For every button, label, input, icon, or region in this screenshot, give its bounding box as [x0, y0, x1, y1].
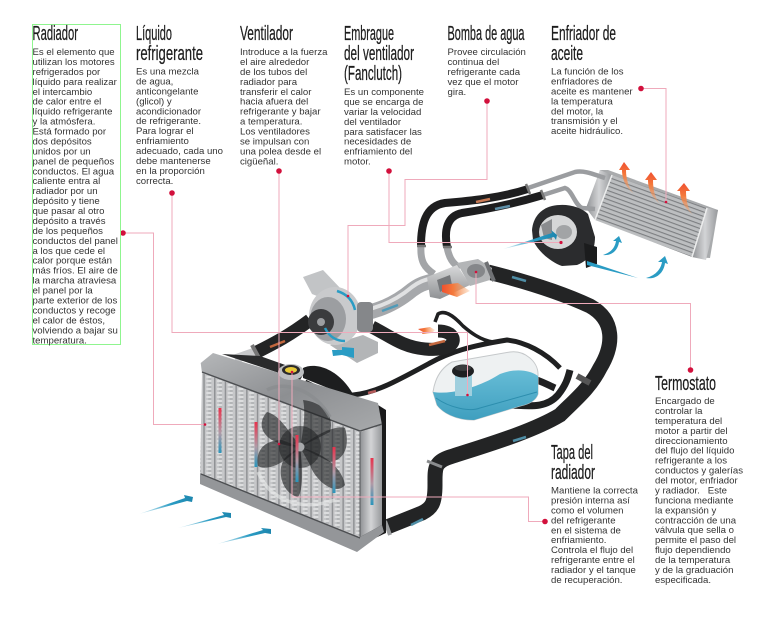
panel: Ventilador: Ventilador — [240, 23, 293, 45]
panel: Tapa del radiador: como el volumen — [551, 505, 624, 516]
panel: Radiador: líquido refrigerante — [32, 107, 112, 118]
panel: Termostato: Termostato — [655, 373, 716, 395]
panel: Bomba de agua — [448, 23, 526, 98]
thin hoses — [305, 312, 570, 406]
panel: Líquido refrigerante: adecuado, cada uno — [136, 146, 223, 157]
panel: Embrague del ventilador: que se encarga de — [344, 97, 423, 108]
panel: Bomba de agua: refrigerante cada — [448, 67, 521, 78]
panel: Líquido refrigerante: en la proporción — [136, 166, 205, 177]
panel: Bomba de agua: Provee circulación — [448, 47, 526, 58]
panel: Tapa del radiador: del refrigerante — [551, 515, 616, 526]
panel: Termostato — [655, 373, 743, 586]
panel: Termostato: de la temperatura — [655, 555, 731, 566]
radiator — [200, 353, 386, 552]
panel: Ventilador: una polea desde el — [240, 146, 321, 157]
panel: Radiador: volviendo a bajar su — [32, 325, 118, 336]
metal pipe and thermostat housing — [365, 259, 494, 313]
orange heat arrows — [619, 162, 693, 215]
panel: Termostato: controlar la — [655, 406, 703, 417]
panel: Bomba de agua: gira. — [448, 87, 466, 98]
panel: Enfriador de aceite: aceite es mantener — [551, 86, 633, 97]
blower motor — [532, 205, 597, 268]
panel: Radiador: utilizan los motores — [32, 57, 115, 68]
panel: Líquido refrigerante: anticongelante — [136, 86, 198, 97]
panel: Embrague del ventilador: del ventilador — [344, 43, 414, 65]
panel: Enfriador de aceite: transmisión y el — [551, 116, 618, 127]
leader lines — [120, 86, 693, 524]
panel: Radiador: panel de pequeños — [32, 156, 114, 167]
large hose: thermostat to radiator — [385, 272, 610, 535]
panel: Ventilador: se impulsan con — [240, 136, 309, 147]
panel: Enfriador de aceite — [551, 23, 633, 137]
panel: Embrague del ventilador — [344, 23, 424, 168]
panel: Termostato: funciona mediante — [655, 495, 733, 506]
panel: Enfriador de aceite: aceite — [551, 43, 583, 65]
panel: Tapa del radiador: Tapa del — [551, 442, 593, 464]
panel: Radiador: conductos y recoge — [32, 305, 116, 316]
hoses to oil cooler — [417, 172, 605, 274]
panel: Bomba de agua: continua del — [448, 57, 499, 68]
blue inlet air arrows — [139, 495, 271, 544]
panel: Tapa del radiador: de recuperación. — [551, 575, 622, 586]
panel: Líquido refrigerante: (glicol) y — [136, 96, 172, 107]
panel: Radiador: líquido para realizar — [32, 77, 118, 88]
panel: Embrague del ventilador: (Fanclutch) — [344, 63, 402, 85]
panel: Radiador: el calor de éstos, — [32, 315, 105, 326]
panel: Ventilador: Introduce a la fuerza — [240, 47, 328, 58]
cooling fan — [257, 400, 347, 497]
panel: Radiador: conductos del panel — [32, 236, 118, 247]
panel: Termostato: permite el paso del — [655, 535, 736, 546]
panel: Radiador: conductos. El agua — [32, 166, 115, 177]
panel: Termostato: y radiador. Este — [655, 485, 727, 496]
panel: Radiador: el panel por la — [32, 286, 93, 297]
panel: Líquido refrigerante: de agua, — [136, 76, 173, 87]
panel: Radiador: el intercambio — [32, 87, 92, 98]
panel: Tapa del radiador: radiador — [551, 462, 595, 484]
panel: Termostato: contracción de una — [655, 515, 737, 526]
panel: Termostato: Encargado de — [655, 396, 715, 407]
panel: Bomba de agua: Bomba de agua — [448, 23, 525, 45]
panel: Embrague del ventilador: del ventilador — [344, 117, 402, 128]
panel: Ventilador: transferir el calor — [240, 87, 312, 98]
panel: Termostato: refrigerante a los — [655, 456, 727, 467]
water pump — [303, 270, 378, 363]
panel: Tapa del radiador: refrigerante entre el — [551, 555, 635, 566]
panel: Radiador: Está formado por — [32, 127, 107, 138]
panel: Ventilador: refrigerante y bajar — [240, 107, 321, 118]
panel: Enfriador de aceite: del motor, la — [551, 106, 604, 117]
panel: Tapa del radiador: Controla el flujo del — [551, 545, 633, 556]
panel: Radiador: que pasar al otro — [32, 206, 104, 217]
panel: Termostato: temperatura del — [655, 416, 722, 427]
panel: Ventilador: cigüeñal. — [240, 156, 278, 167]
panel: Embrague del ventilador: Es un componente — [344, 87, 424, 98]
panel: Radiador: temperatura. — [32, 335, 87, 346]
panel: Termostato: y de la graduación — [655, 565, 733, 576]
panel: Termostato: especificada. — [655, 575, 711, 586]
panel: Líquido refrigerante: de refrigerante. — [136, 116, 201, 127]
arrows at pump and thermostat — [332, 283, 470, 358]
panel: Embrague del ventilador: motor. — [344, 157, 371, 168]
coolant tank — [433, 352, 538, 420]
panel: Enfriador de aceite: la temperatura — [551, 96, 614, 107]
panel: Termostato: direccionamiento — [655, 436, 728, 447]
hose: pump to tank — [372, 327, 453, 349]
panel: Bomba de agua: vez que el motor — [448, 77, 519, 88]
panel: Tapa del radiador: Mantiene la correcta — [551, 486, 639, 496]
panel: Radiador — [32, 23, 120, 346]
panel: Radiador: más fríos. El aire de — [32, 266, 118, 277]
panel: Enfriador de aceite: aceite hidráulico. — [551, 126, 623, 137]
oil cooler — [586, 170, 718, 260]
panel: Radiador: a los que cede el — [32, 246, 105, 257]
panel: Ventilador: radiador para — [240, 77, 298, 88]
panel: Líquido refrigerante: Para lograr el — [136, 126, 194, 137]
panel: Radiador: refrigerados por — [32, 67, 101, 78]
panel: Tapa del radiador: radiador y el tanque — [551, 565, 636, 576]
panel: Embrague del ventilador: enfriamiento del — [344, 147, 412, 158]
panel: Radiador: dos depósitos — [32, 136, 92, 147]
panel: Embrague del ventilador: variar la velocidad — [344, 107, 421, 118]
blue air flow arrows at blower — [503, 230, 668, 278]
panel: Ventilador: a temperatura. — [240, 117, 302, 128]
flow bars — [218, 408, 374, 505]
panel: Radiador: calor porque están — [32, 256, 112, 267]
panel: Enfriador de aceite: La función de los — [551, 66, 624, 78]
panel: Líquido refrigerante: acondicionador — [136, 106, 202, 117]
panel: Termostato: la expansión y — [655, 505, 717, 516]
panel: Tapa del radiador: enfriamiento. — [551, 535, 606, 546]
panel: Ventilador: Los ventiladores — [240, 127, 310, 138]
panel: Líquido refrigerante: debe mantenerse — [136, 156, 211, 167]
panel: Embrague del ventilador: necesidades de — [344, 137, 411, 148]
hose: pump to radiator — [235, 320, 310, 359]
panel: Termostato: motor a partir del — [655, 426, 728, 437]
panel: Ventilador — [240, 23, 328, 167]
panel: Ventilador: de los tubos del — [240, 67, 307, 78]
panel: Embrague del ventilador: Embrague — [344, 23, 394, 45]
panel: Radiador: unidos por un — [32, 146, 91, 157]
panel: Radiador: radiador por un — [32, 186, 98, 197]
panel: Líquido refrigerante: enfriamiento — [136, 136, 189, 147]
panel: Radiador: Es el elemento que — [32, 47, 115, 58]
panel: Líquido refrigerante — [136, 23, 223, 187]
panel: Termostato: conductos y galerías — [655, 466, 743, 477]
panel: Enfriador de aceite: enfriadores de — [551, 76, 612, 87]
panel: Termostato: del flujo del líquido — [655, 446, 734, 457]
panel: Líquido refrigerante: refrigerante — [136, 43, 203, 65]
panel: Embrague del ventilador: para satisfacer las — [344, 127, 422, 138]
panel: Termostato: válvula que sella o — [655, 525, 734, 536]
panel: Enfriador de aceite: Enfriador de — [551, 23, 616, 45]
panel: Radiador: caliente entra al — [32, 176, 100, 187]
panel: Radiador: parte exterior de los — [32, 296, 117, 307]
panel: Radiador: de calor entre el — [32, 97, 101, 108]
panel: Ventilador: el aire alrededor — [240, 57, 310, 68]
panel: Termostato: del motor, enfriador — [655, 476, 738, 487]
panel: Radiador: y la atmósfera. — [32, 117, 95, 128]
panel: Líquido refrigerante: Líquido — [136, 23, 172, 45]
panel: Líquido refrigerante: correcta. — [136, 176, 173, 187]
panel: Radiador: Radiador — [32, 23, 78, 45]
panel: Tapa del radiador: presión interna así — [551, 495, 630, 506]
radiator cap — [278, 364, 304, 380]
panel: Tapa del radiador — [551, 442, 639, 586]
panel: Radiador: la marcha atraviesa — [32, 276, 117, 287]
panel: Radiador: de los pequeños — [32, 226, 103, 237]
panel: Radiador: depósito y tiene — [32, 196, 100, 207]
panel: Termostato: flujo dependiendo — [655, 545, 731, 556]
panel: Radiador: depósito a través — [32, 216, 106, 227]
panel: Líquido refrigerante: Es una mezcla — [136, 66, 200, 78]
panel: Ventilador: hacia afuera del — [240, 97, 308, 108]
panel: Tapa del radiador: en el sistema de — [551, 525, 621, 536]
